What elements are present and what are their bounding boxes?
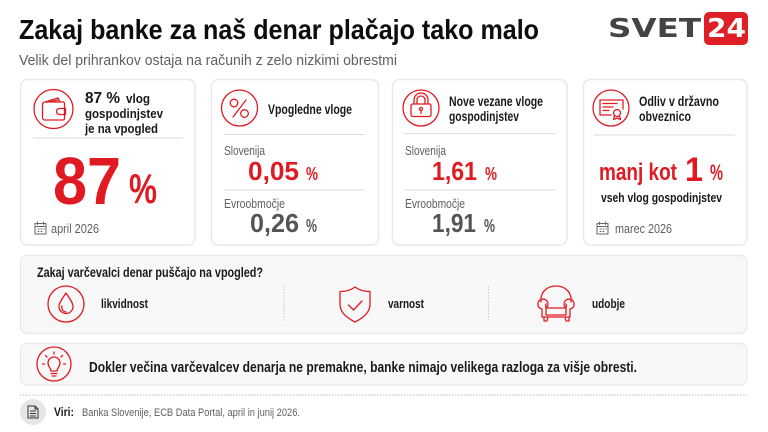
- item: likvidnost: [48, 286, 149, 322]
- panel: new term deposits: [392, 80, 567, 245]
- card heading: 87 %: [85, 90, 120, 107]
- value: Evroobmočje: Evroobmočje: [405, 196, 465, 211]
- title: Zakaj banke za naš denar plačajo tako malo: [19, 14, 539, 45]
- date: april 2026: april 2026: [51, 221, 99, 236]
- value: Evroobmočje: [405, 196, 495, 238]
- value: Evroobmočje: %: [484, 216, 495, 236]
- value: Slovenija: Slovenija: [224, 143, 266, 158]
- value: Slovenija: %: [306, 164, 318, 184]
- item: likvidnost: likvidnost: [101, 296, 149, 311]
- date: april 2026: [35, 221, 99, 236]
- panel: why savers keep money on sight: [20, 256, 747, 334]
- card heading: gospodinjstev: [449, 109, 519, 124]
- item: varnost: [340, 287, 425, 322]
- value: Slovenija: %: [485, 164, 497, 184]
- card heading: Nove vezane vloge: [449, 94, 543, 109]
- value: Evroobmočje: Evroobmočje: [224, 196, 285, 211]
- panel: outflow to government bond: [584, 80, 747, 245]
- sources: [20, 399, 300, 425]
- card heading: Odliv v državno: [639, 94, 719, 109]
- panel: 87 % of deposits: [20, 80, 195, 245]
- panel: sight deposits: [212, 80, 378, 245]
- value: Slovenija: [224, 143, 318, 186]
- card heading: [84, 90, 164, 136]
- big value: manj kot 1 %: manj kot: [599, 159, 677, 186]
- value: Evroobmočje: %: [306, 216, 317, 236]
- big value: manj kot 1 %: [599, 151, 723, 189]
- value: Slovenija: 0,05: [248, 156, 299, 186]
- logo: SVET24: 24: [707, 14, 746, 44]
- subtitle: Velik del prihrankov ostaja na računih z zelo nizkimi obrestmi: [19, 52, 397, 69]
- big number: 87 %: %: [129, 165, 157, 212]
- card heading: je na vpogled: [84, 121, 158, 136]
- card heading: obveznico: [639, 109, 691, 124]
- value: Slovenija: 1,61: [432, 156, 477, 186]
- big value: manj kot 1 %: %: [710, 160, 723, 185]
- card heading: gospodinjstev: [85, 106, 164, 121]
- card heading: [449, 94, 543, 124]
- sources: Banka Slovenije, ECB Data Portal, april in junij 2026.: [82, 407, 300, 419]
- value: Evroobmočje: [224, 196, 317, 238]
- logo: SVET24: SVET: [608, 14, 701, 44]
- takeaway text: Dokler večina varčevalcev denarja ne premakne, banke nimajo velikega razloga za višje obresti.: [89, 360, 637, 376]
- date: marec 2026: marec 2026: [615, 221, 672, 236]
- item: udobje: [538, 286, 625, 321]
- item: varnost: varnost: [388, 296, 425, 311]
- big value: manj kot 1 %: 1: [685, 151, 703, 189]
- icon: percent: [222, 90, 258, 126]
- sources: Viri:: [54, 407, 74, 419]
- value: Evroobmočje: 1,91: [432, 208, 476, 238]
- icon: document: [20, 399, 46, 425]
- panel: takeaway: [20, 344, 747, 385]
- icon: certificate: [593, 90, 629, 126]
- card heading: Vpogledne vloge: [268, 102, 352, 117]
- date: marec 2026: [597, 221, 672, 236]
- card heading: vlog: [126, 91, 150, 106]
- value: Evroobmočje: 0,26: [250, 208, 299, 238]
- logo: SVET24: [608, 12, 748, 45]
- icon: padlock: [403, 90, 439, 126]
- value: Slovenija: [405, 143, 497, 186]
- value: Slovenija: Slovenija: [405, 143, 447, 158]
- icon: light bulb: [37, 347, 71, 381]
- big number: 87 %: 87: [53, 144, 121, 219]
- value caption: vseh vlog gospodinjstev: [601, 190, 723, 205]
- icon: wallet: [34, 90, 73, 128]
- card heading: [639, 94, 719, 124]
- item: udobje: udobje: [592, 296, 625, 311]
- panel heading: Zakaj varčevalci denar puščajo na vpogled?: [37, 265, 263, 280]
